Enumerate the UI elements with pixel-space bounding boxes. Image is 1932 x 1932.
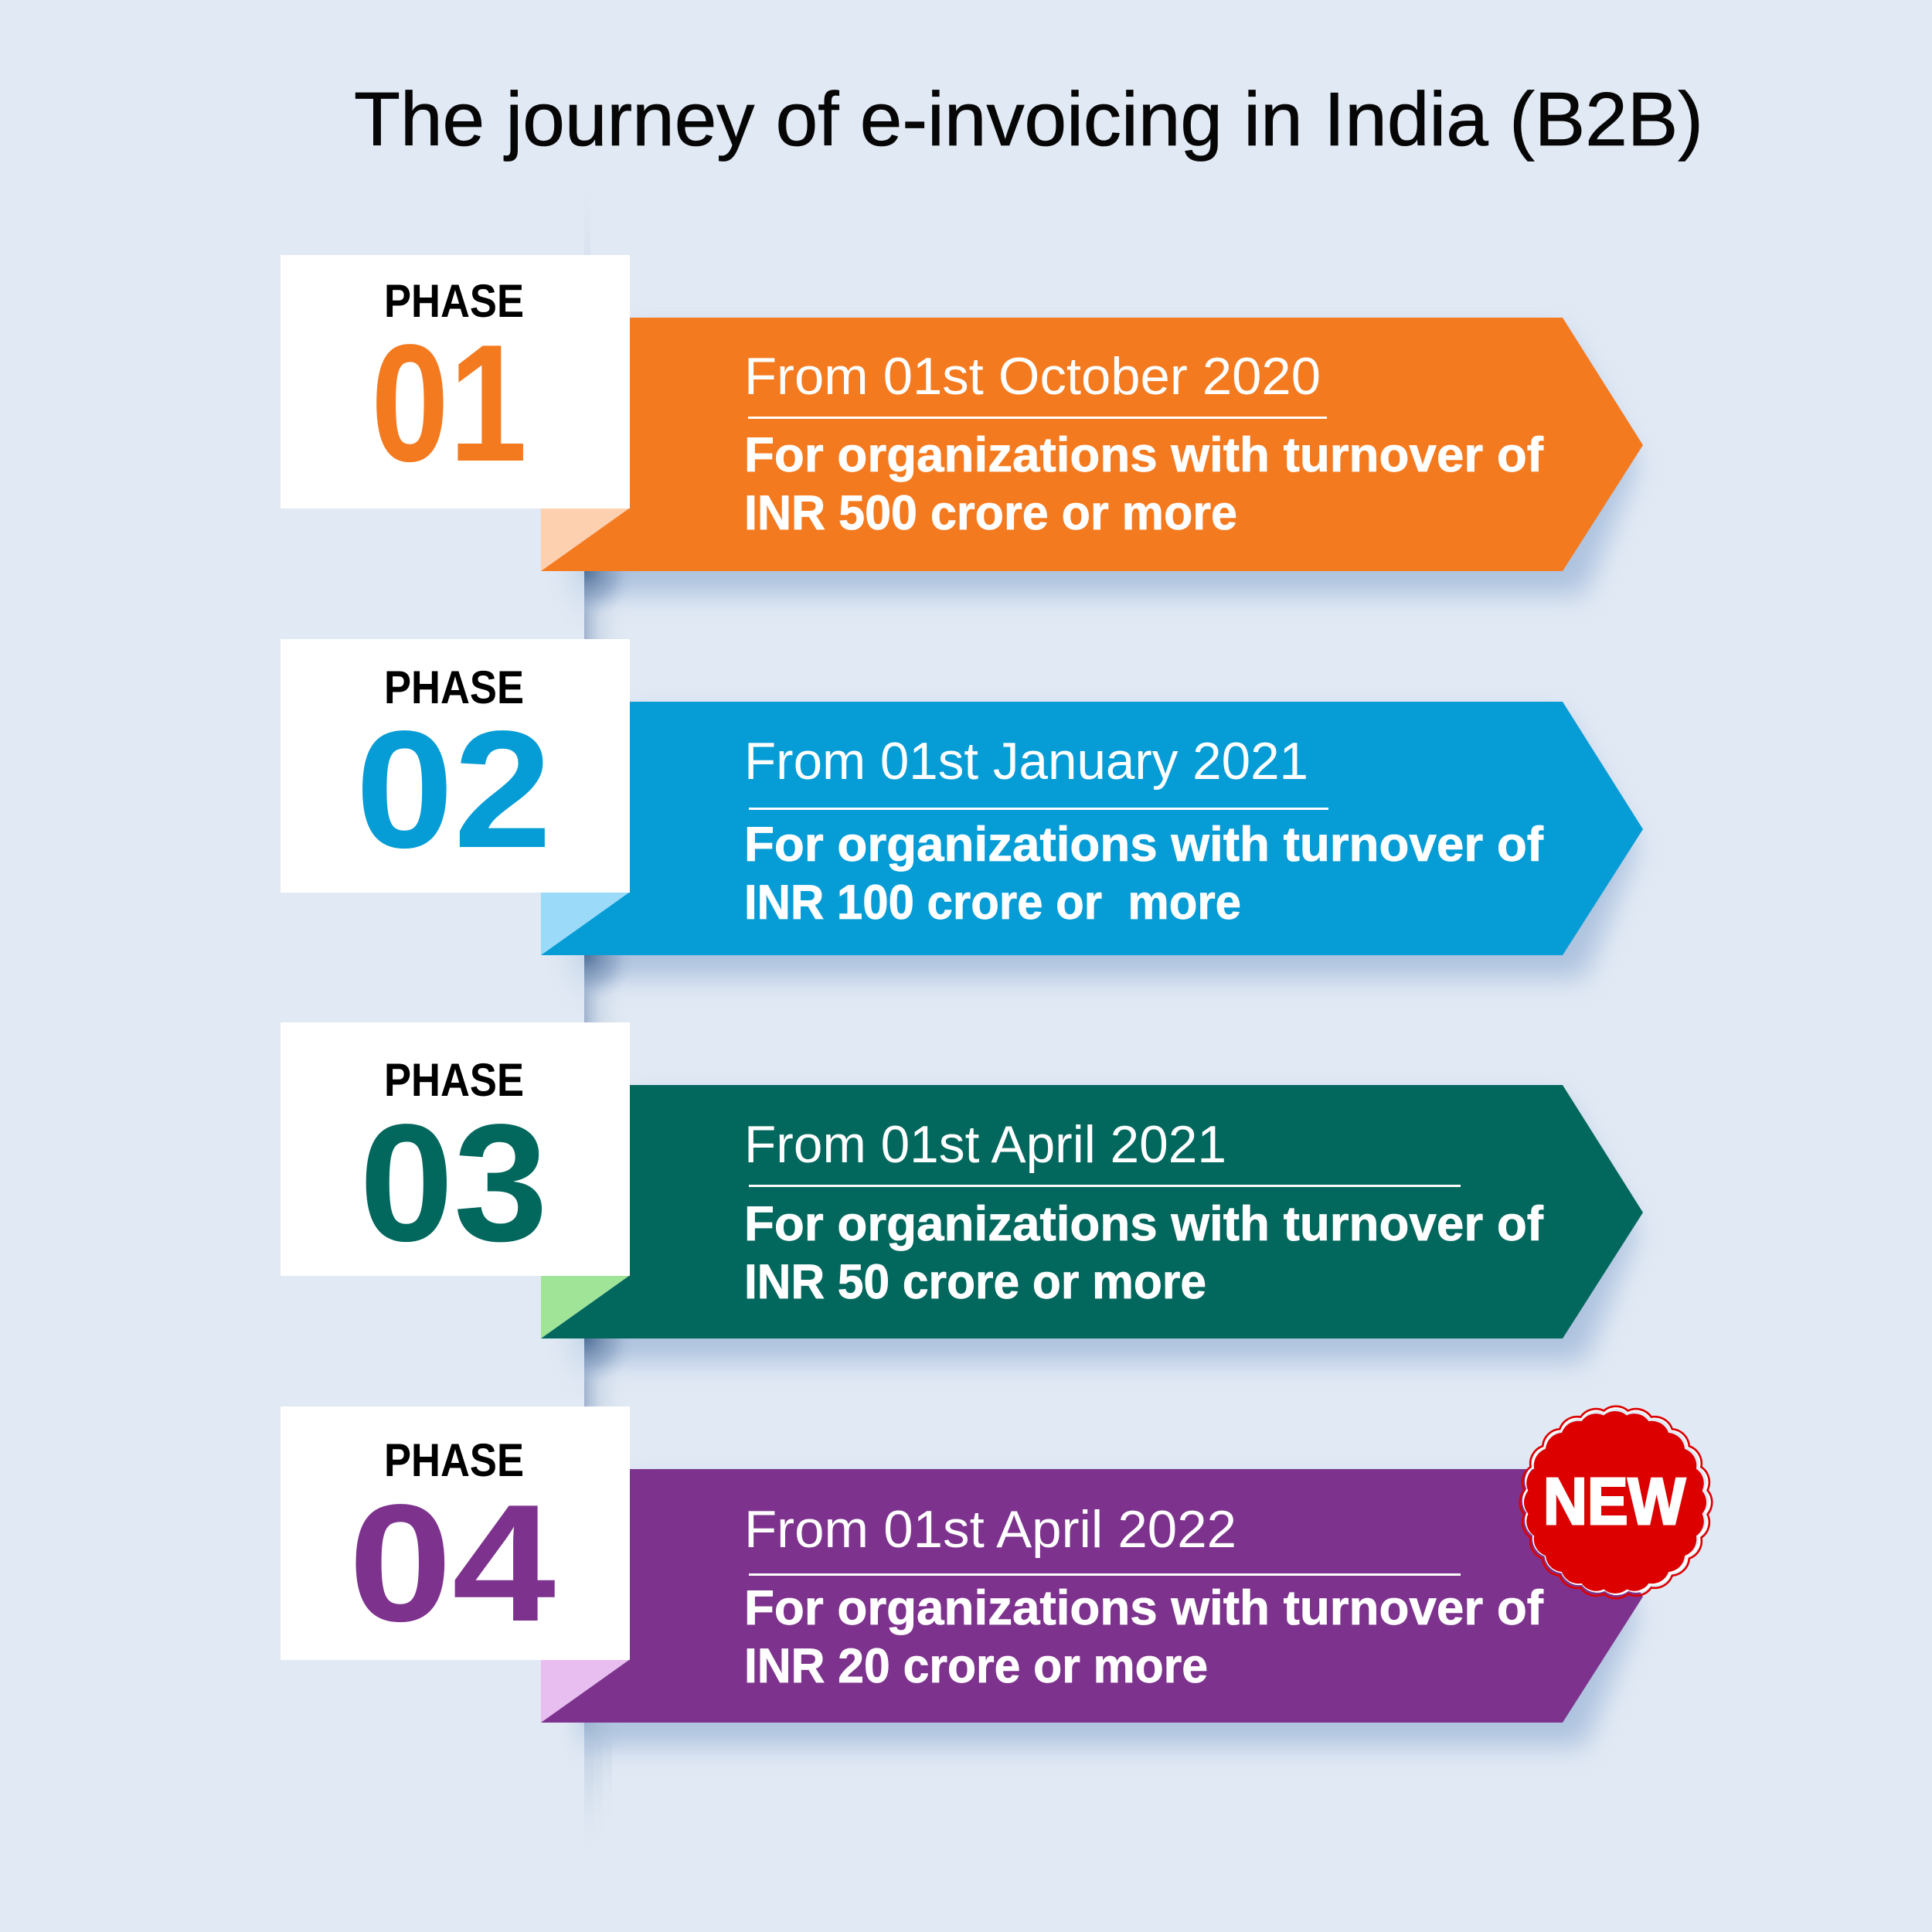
description: phase 04: [744, 1581, 1544, 1693]
phase card: 03: PHASE: [384, 1054, 524, 1106]
panel: phase 01: [281, 255, 1643, 571]
description: phase 01: [744, 428, 1544, 540]
description: phase 03: For organizations with turnover of: [744, 1197, 1544, 1251]
date: phase 03: From 01st April 2021: [744, 1115, 1226, 1174]
description: phase 02: [744, 818, 1544, 930]
fold: phase 02: [541, 893, 629, 955]
phase card: 04: [281, 1406, 630, 1660]
description: phase 03: INR 50 crore or more: [744, 1255, 1206, 1309]
ribbon: phase 04: [541, 1469, 1643, 1723]
date: phase 01: From 01st October 2020: [744, 347, 1321, 406]
panel: phase 03: [281, 1022, 1643, 1338]
timeline spine and ribbon shadows: [541, 193, 1637, 1869]
phase card: 04: PHASE: [384, 1434, 524, 1486]
panel: phase 02: [281, 639, 1643, 955]
phase card: 03: [281, 1022, 630, 1276]
panel: phase 04: [281, 1406, 1643, 1723]
description: phase 04: For organizations with turnover of: [744, 1581, 1544, 1635]
phase card: 02: 02: [355, 696, 552, 883]
fold: phase 01: [541, 509, 629, 571]
description: phase 03: [744, 1197, 1544, 1309]
description: phase 02: INR 100 crore or more: [744, 876, 1241, 930]
phase card: 01: 01: [371, 309, 527, 496]
badge: NEW: NEW: [1543, 1465, 1686, 1539]
fold: phase 03: [541, 1276, 629, 1338]
divider: phase 04: [749, 1573, 1461, 1576]
date: phase 04: From 01st April 2022: [744, 1500, 1236, 1559]
divider: phase 01: [748, 417, 1327, 419]
divider: phase 03: [749, 1185, 1461, 1187]
phase card: 01: [281, 255, 630, 509]
date: phase 02: From 01st January 2021: [744, 732, 1308, 791]
description: phase 04: INR 20 crore or more: [744, 1639, 1208, 1693]
ribbon: phase 01: [541, 318, 1643, 571]
phase card: 02: [281, 639, 630, 893]
badge: NEW: [1509, 1396, 1723, 1609]
phase card: 04: 04: [349, 1469, 556, 1656]
description: phase 02: For organizations with turnover of: [744, 818, 1544, 872]
description: phase 01: INR 500 crore or more: [744, 486, 1237, 540]
phase card: 03: 03: [359, 1089, 548, 1276]
divider: phase 02: [749, 808, 1328, 810]
description: phase 01: For organizations with turnover of: [744, 428, 1544, 482]
title: The journey of e-invoicing in India (B2B): [354, 77, 1703, 162]
ribbon: phase 02: [541, 702, 1643, 955]
phase card: 02: PHASE: [384, 662, 524, 713]
fold: phase 04: [541, 1660, 629, 1723]
ribbon: phase 03: [541, 1085, 1643, 1338]
phase card: 01: PHASE: [384, 275, 524, 327]
